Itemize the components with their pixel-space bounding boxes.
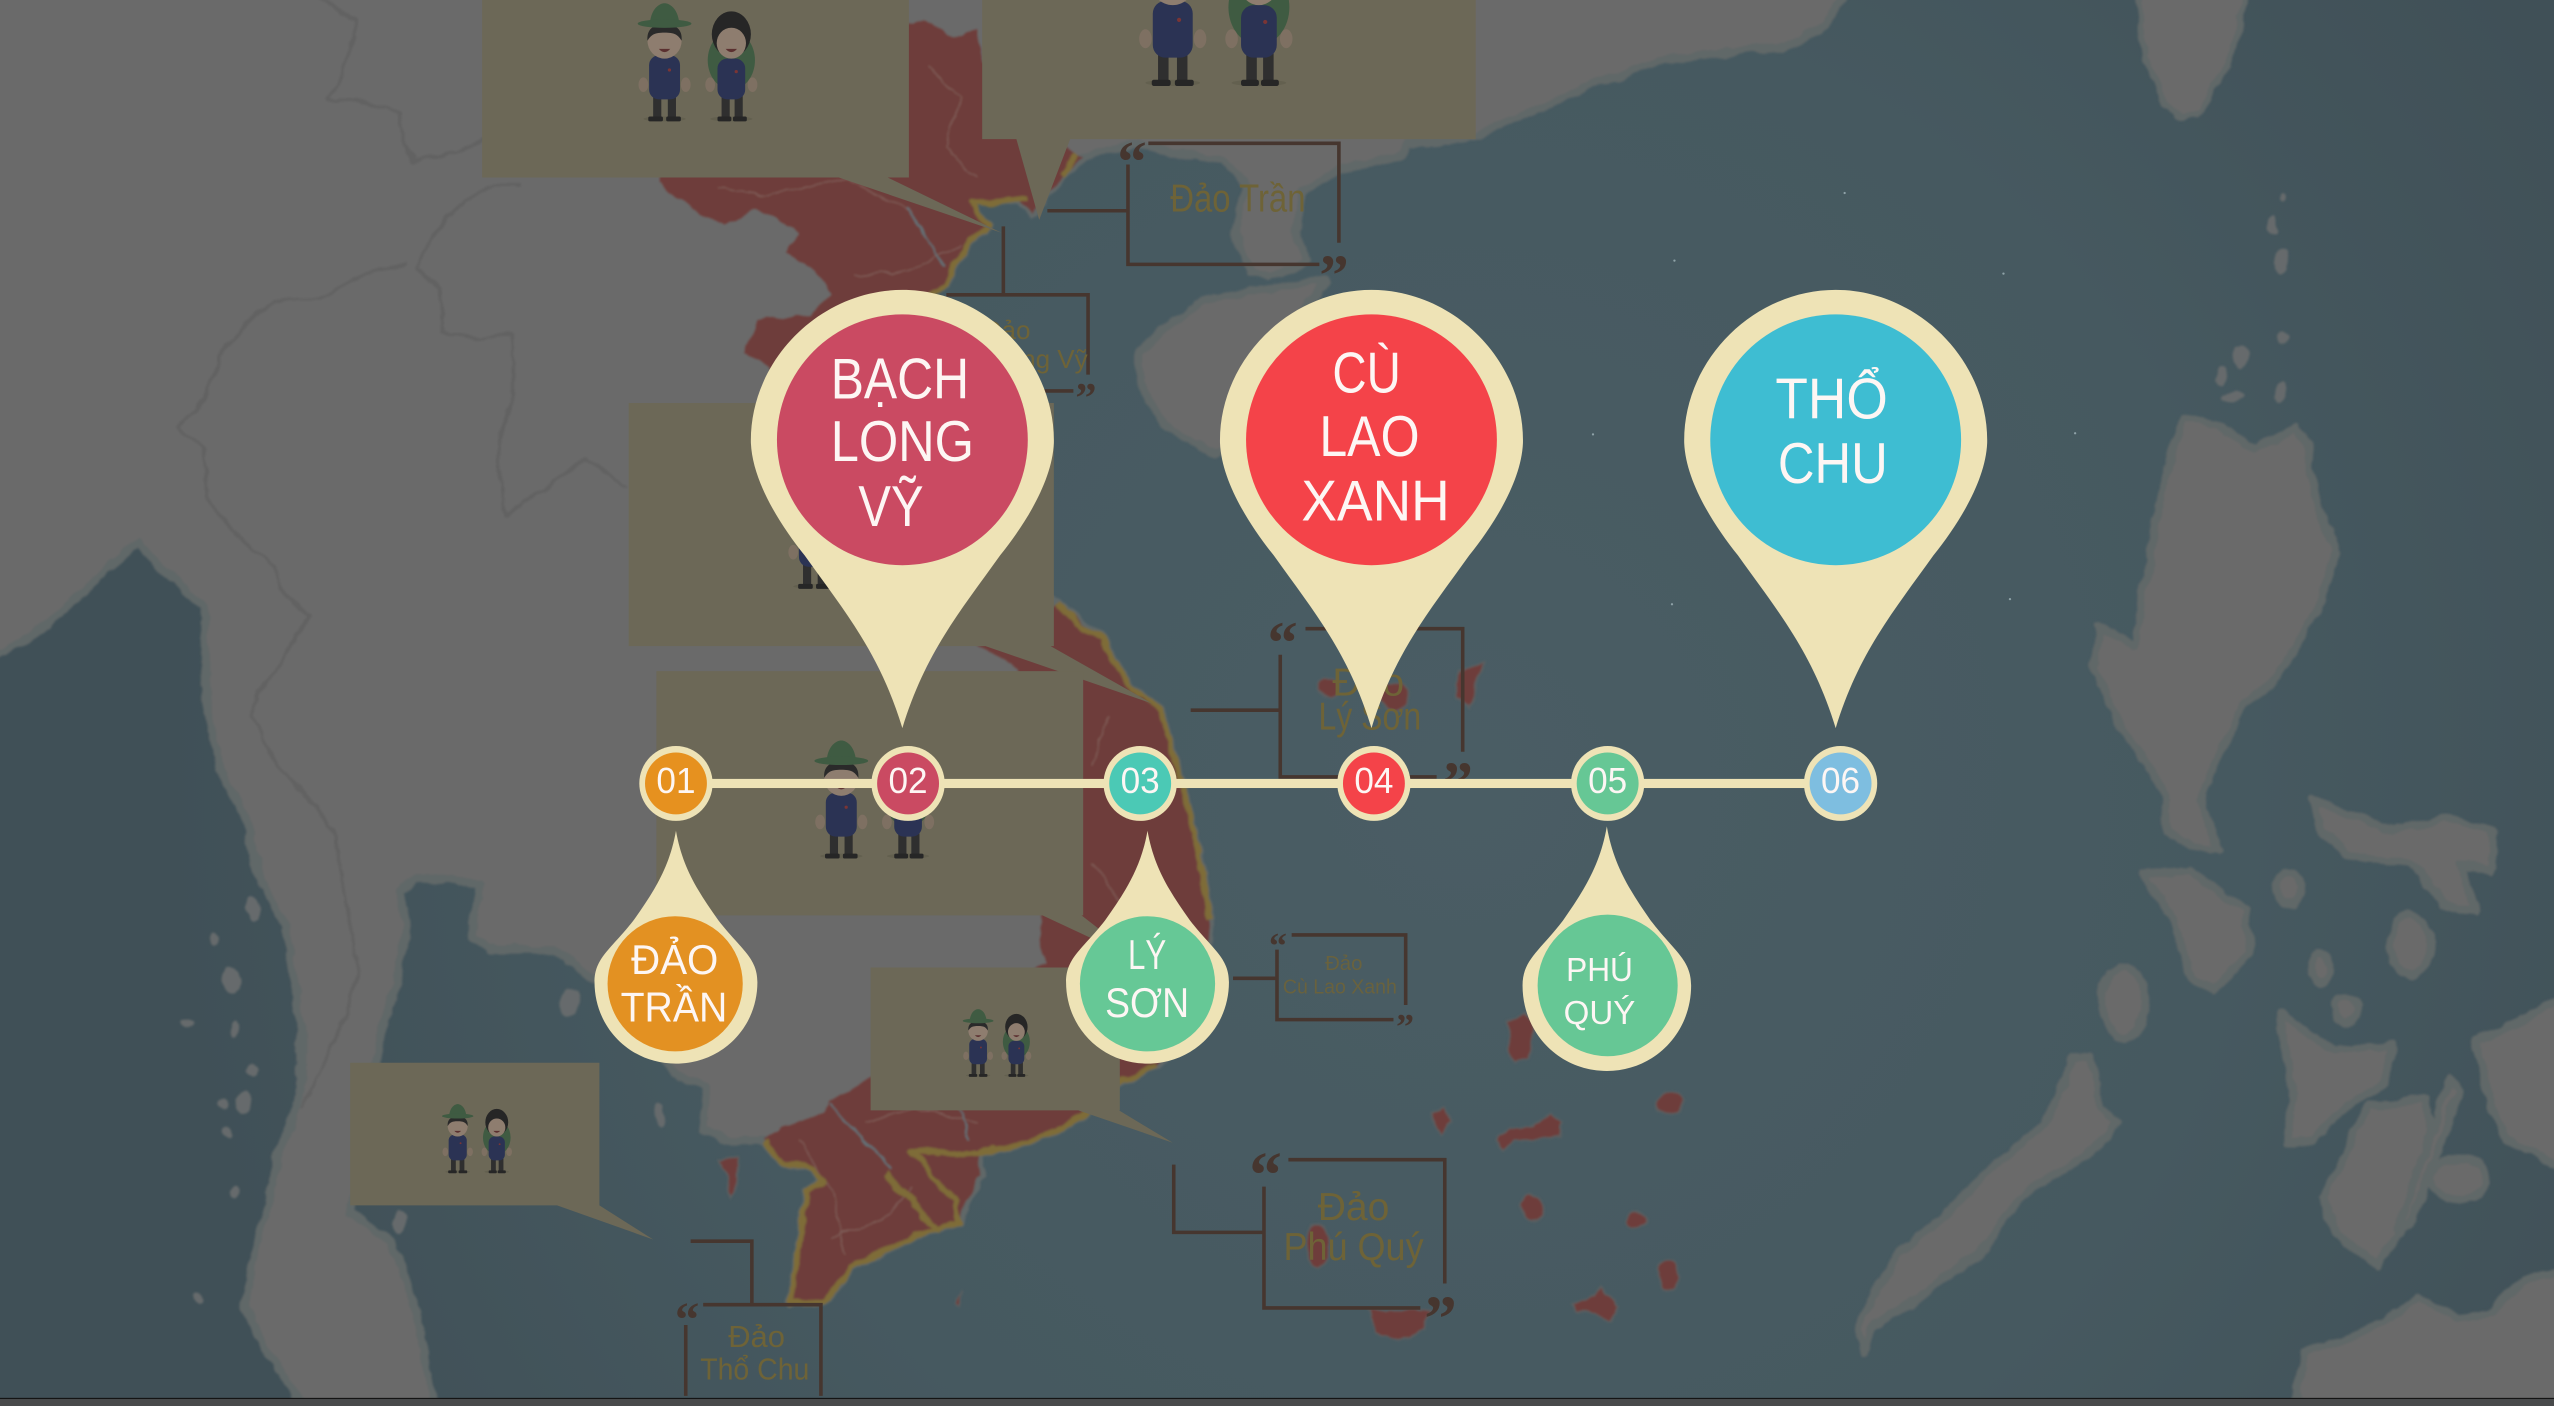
timeline node 01 xyxy=(639,746,713,821)
callout: Đảo Phú Quý xyxy=(1174,1140,1457,1356)
pin: Bạch Long Vỹ: BẠCH xyxy=(831,347,969,411)
pin: Bạch Long Vỹ: LONG xyxy=(831,410,974,474)
pin: Cù Lao Xanh xyxy=(1220,290,1523,728)
callout: Đảo Lý Sơn: Đảo xyxy=(1332,662,1404,705)
pin: Đảo Trần xyxy=(595,831,757,1064)
pin: Bạch Long Vỹ xyxy=(751,290,1054,728)
pin: Lý Sơn xyxy=(1066,831,1229,1064)
panel: speech box 4 xyxy=(656,671,1140,961)
callout: Đảo Lý Sơn: “ xyxy=(1267,610,1298,677)
pin: Thổ Chu: THỔ xyxy=(1775,367,1888,432)
callout: Đảo Cù Lao Xanh: “ xyxy=(1269,926,1287,966)
map: province lines and rivers xyxy=(717,65,1124,1254)
pin: Lý Sơn: LÝ xyxy=(1128,931,1166,978)
callout: Đảo Thổ Chu xyxy=(675,1241,821,1396)
callout: Đảo Cù Lao Xanh xyxy=(1233,926,1414,1046)
callout: Đảo Thổ Chu: “ xyxy=(675,1292,699,1347)
pin: Cù Lao Xanh: LAO xyxy=(1319,405,1420,469)
pin: Bạch Long Vỹ: VỸ xyxy=(858,475,924,539)
map: vietnamese islands xyxy=(718,663,1683,1339)
pin: Lý Sơn: SƠN xyxy=(1105,979,1189,1026)
callout: Đảo Phú Quý: “ xyxy=(1249,1140,1282,1212)
pin: Phú Quý: QUÝ xyxy=(1564,995,1635,1032)
pin: Cù Lao Xanh: CÙ xyxy=(1332,342,1401,406)
pin: Phú Quý: PHÚ xyxy=(1566,951,1633,989)
callout: Đảo Trần: ” xyxy=(1319,243,1349,308)
map: gold coastline xyxy=(766,153,1210,1303)
callout: Đảo Bạch Long Vỹ: Đảo xyxy=(983,315,1031,345)
callout: Đảo Cù Lao Xanh: Đảo xyxy=(1325,953,1362,975)
map: asia mainland xyxy=(0,0,1873,1406)
pin: Đảo Trần: TRẦN xyxy=(621,984,727,1031)
callout: Đảo Cù Lao Xanh: ” xyxy=(1396,1006,1414,1046)
timeline line xyxy=(676,779,1841,788)
timeline node 02 xyxy=(871,746,945,821)
map: small grey islands xyxy=(181,191,2290,1303)
callout: Đảo Phú Quý: Đảo xyxy=(1318,1186,1389,1229)
panel: speech box 6 xyxy=(350,1063,653,1240)
map: land border lines xyxy=(179,0,627,1108)
pin: Thổ Chu xyxy=(1684,290,1987,728)
callout: Đảo Cù Lao Xanh: Cù Lao Xanh xyxy=(1283,977,1397,999)
timeline node 03 xyxy=(1104,746,1177,821)
panel: speech box 1 xyxy=(482,0,1002,233)
map: philippines xyxy=(1857,417,2554,1406)
map: taiwan xyxy=(2135,0,2254,117)
callout: Đảo Bạch Long Vỹ: Bạch Long Vỹ xyxy=(926,344,1088,374)
timeline node 04 xyxy=(1337,746,1411,821)
pin: Cù Lao Xanh: XANH xyxy=(1301,470,1450,534)
map: hainan xyxy=(1140,280,1326,453)
pin: Đảo Trần: ĐẢO xyxy=(631,936,718,983)
timeline node 05 xyxy=(1571,746,1644,821)
timeline node 06: 06 xyxy=(1821,761,1860,801)
timeline node 05: 05 xyxy=(1588,761,1627,801)
panel: speech box 5 xyxy=(871,968,1173,1143)
callout: Đảo Trần xyxy=(1047,129,1349,308)
callout: Đảo Thổ Chu: Đảo xyxy=(728,1319,785,1354)
timeline node 04: 04 xyxy=(1354,761,1393,801)
callout: Đảo Lý Sơn xyxy=(1191,610,1473,817)
callout: Đảo Thổ Chu: Thổ Chu xyxy=(700,1352,809,1387)
callout: Đảo Lý Sơn: Lý Sơn xyxy=(1319,696,1421,739)
callout: Đảo Trần: Đảo Trần xyxy=(1170,178,1306,221)
callout: Đảo Phú Quý: Phú Quý xyxy=(1284,1226,1424,1269)
callout: Đảo Lý Sơn: ” xyxy=(1443,750,1473,817)
pin: Thổ Chu: CHU xyxy=(1778,432,1888,496)
timeline node 02: 02 xyxy=(889,761,928,801)
timeline node 06 xyxy=(1804,746,1877,821)
pin: Phú Quý xyxy=(1523,826,1691,1071)
map: sea sparkle dots xyxy=(1592,192,2076,605)
callout: Đảo Trần: “ xyxy=(1117,129,1147,194)
bottom window strip xyxy=(0,1398,2554,1406)
panel: speech box 3 xyxy=(629,403,1152,704)
panel: speech box 2 xyxy=(982,0,1476,220)
map: vietnam mainland xyxy=(652,23,1210,1303)
callout: Đảo Bạch Long Vỹ: ” xyxy=(1075,375,1097,422)
callout: Đảo Bạch Long Vỹ xyxy=(926,226,1097,422)
timeline node 01: 01 xyxy=(656,761,696,801)
timeline node 03: 03 xyxy=(1121,761,1160,801)
callout: Đảo Phú Quý: ” xyxy=(1424,1284,1457,1356)
